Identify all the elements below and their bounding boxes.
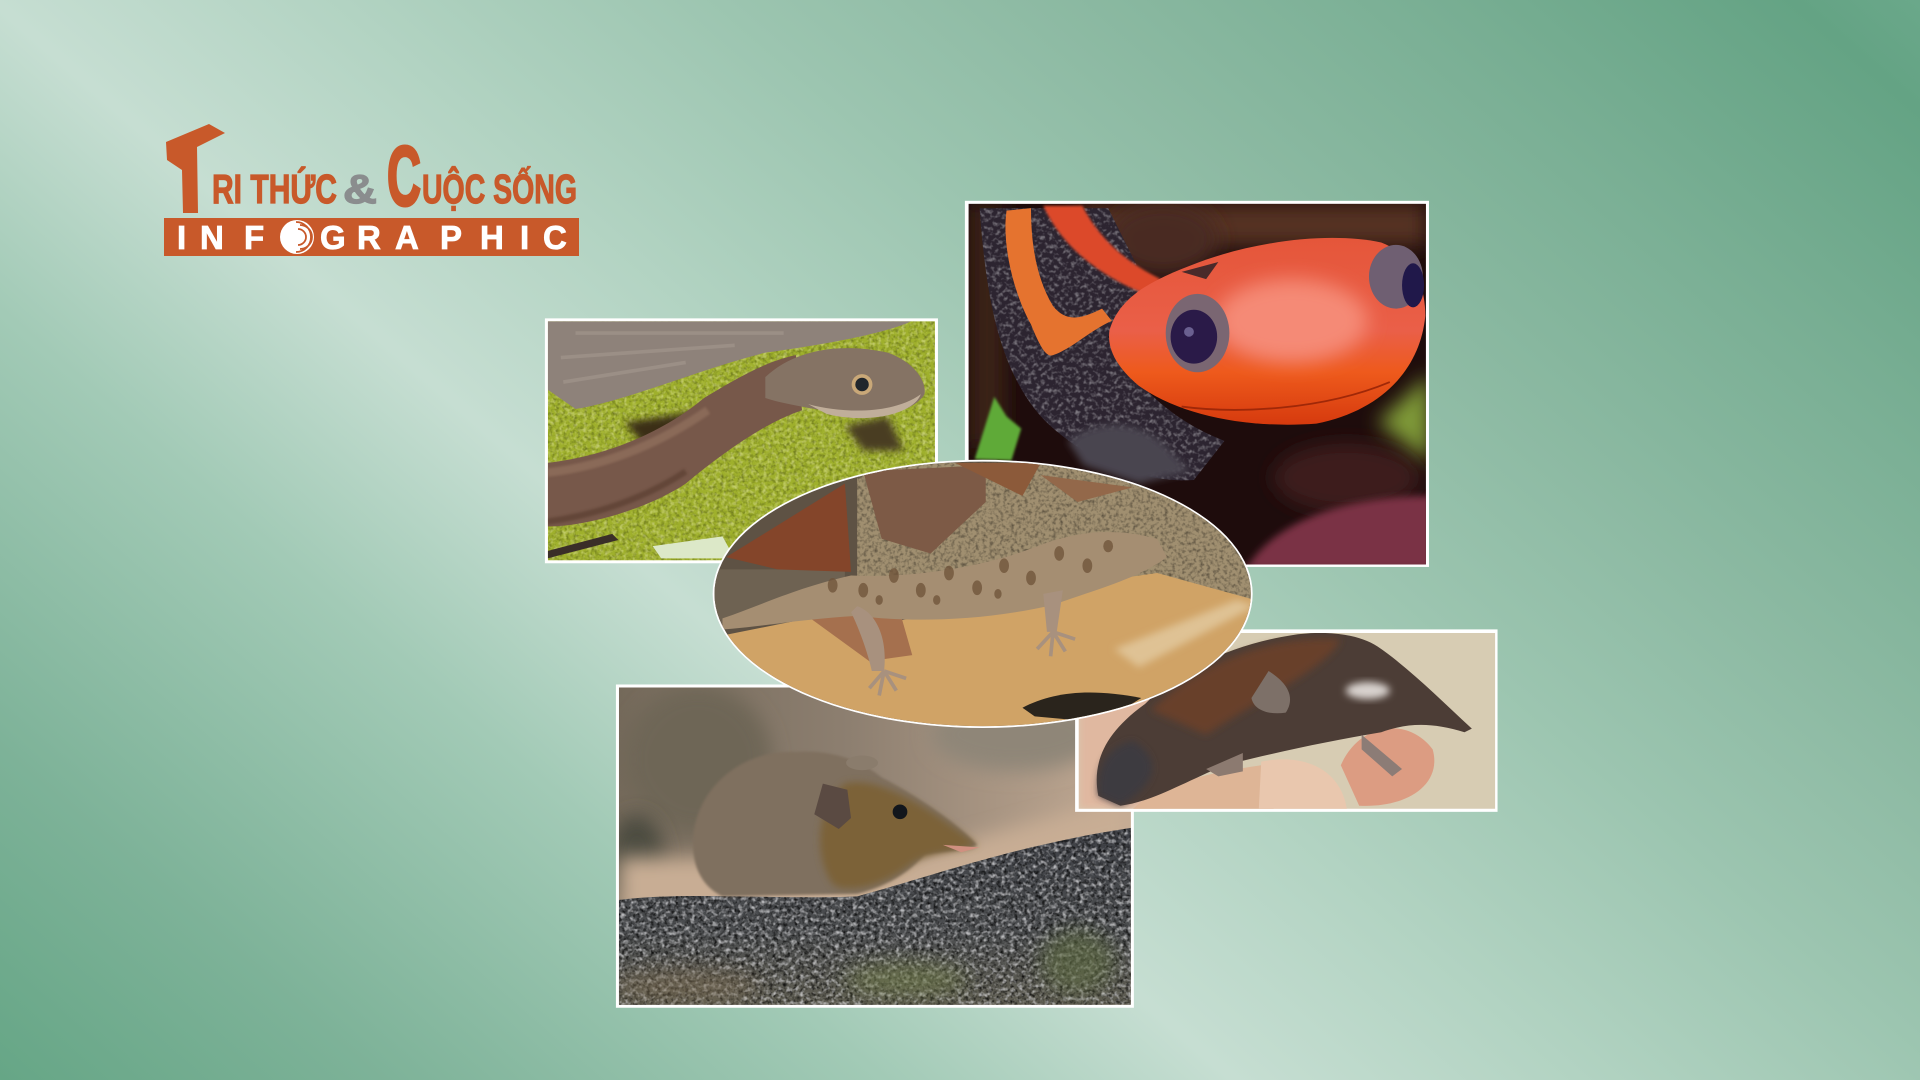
photo: red-headed salamander: [965, 201, 1433, 569]
logo banner: INFOGRAPHIC: INF: [177, 219, 264, 256]
logo: Tri thức & Cuộc sống Infographic: [164, 124, 579, 256]
photo: tree shrew on rock: [610, 684, 1134, 1008]
leaf litter: [726, 463, 1133, 572]
logo wordmark: C: [387, 129, 421, 223]
photo: shrew on a hand: [1075, 629, 1498, 812]
logo wordmark: RI THỨC: [212, 166, 337, 212]
logo wordmark: [212, 129, 577, 223]
logo wordmark: UỘC SỐNG: [422, 166, 577, 212]
logo banner: INFOGRAPHIC: [164, 218, 579, 256]
gecko: [722, 532, 1167, 696]
logo wordmark: &: [343, 166, 377, 212]
logo banner: INFOGRAPHIC: GRAPHIC: [320, 219, 567, 256]
photo: gecko on leaf litter in oval frame: [710, 459, 1255, 731]
logo icon: T roof mark: [166, 124, 225, 213]
photo: snake on moss: [545, 318, 938, 563]
